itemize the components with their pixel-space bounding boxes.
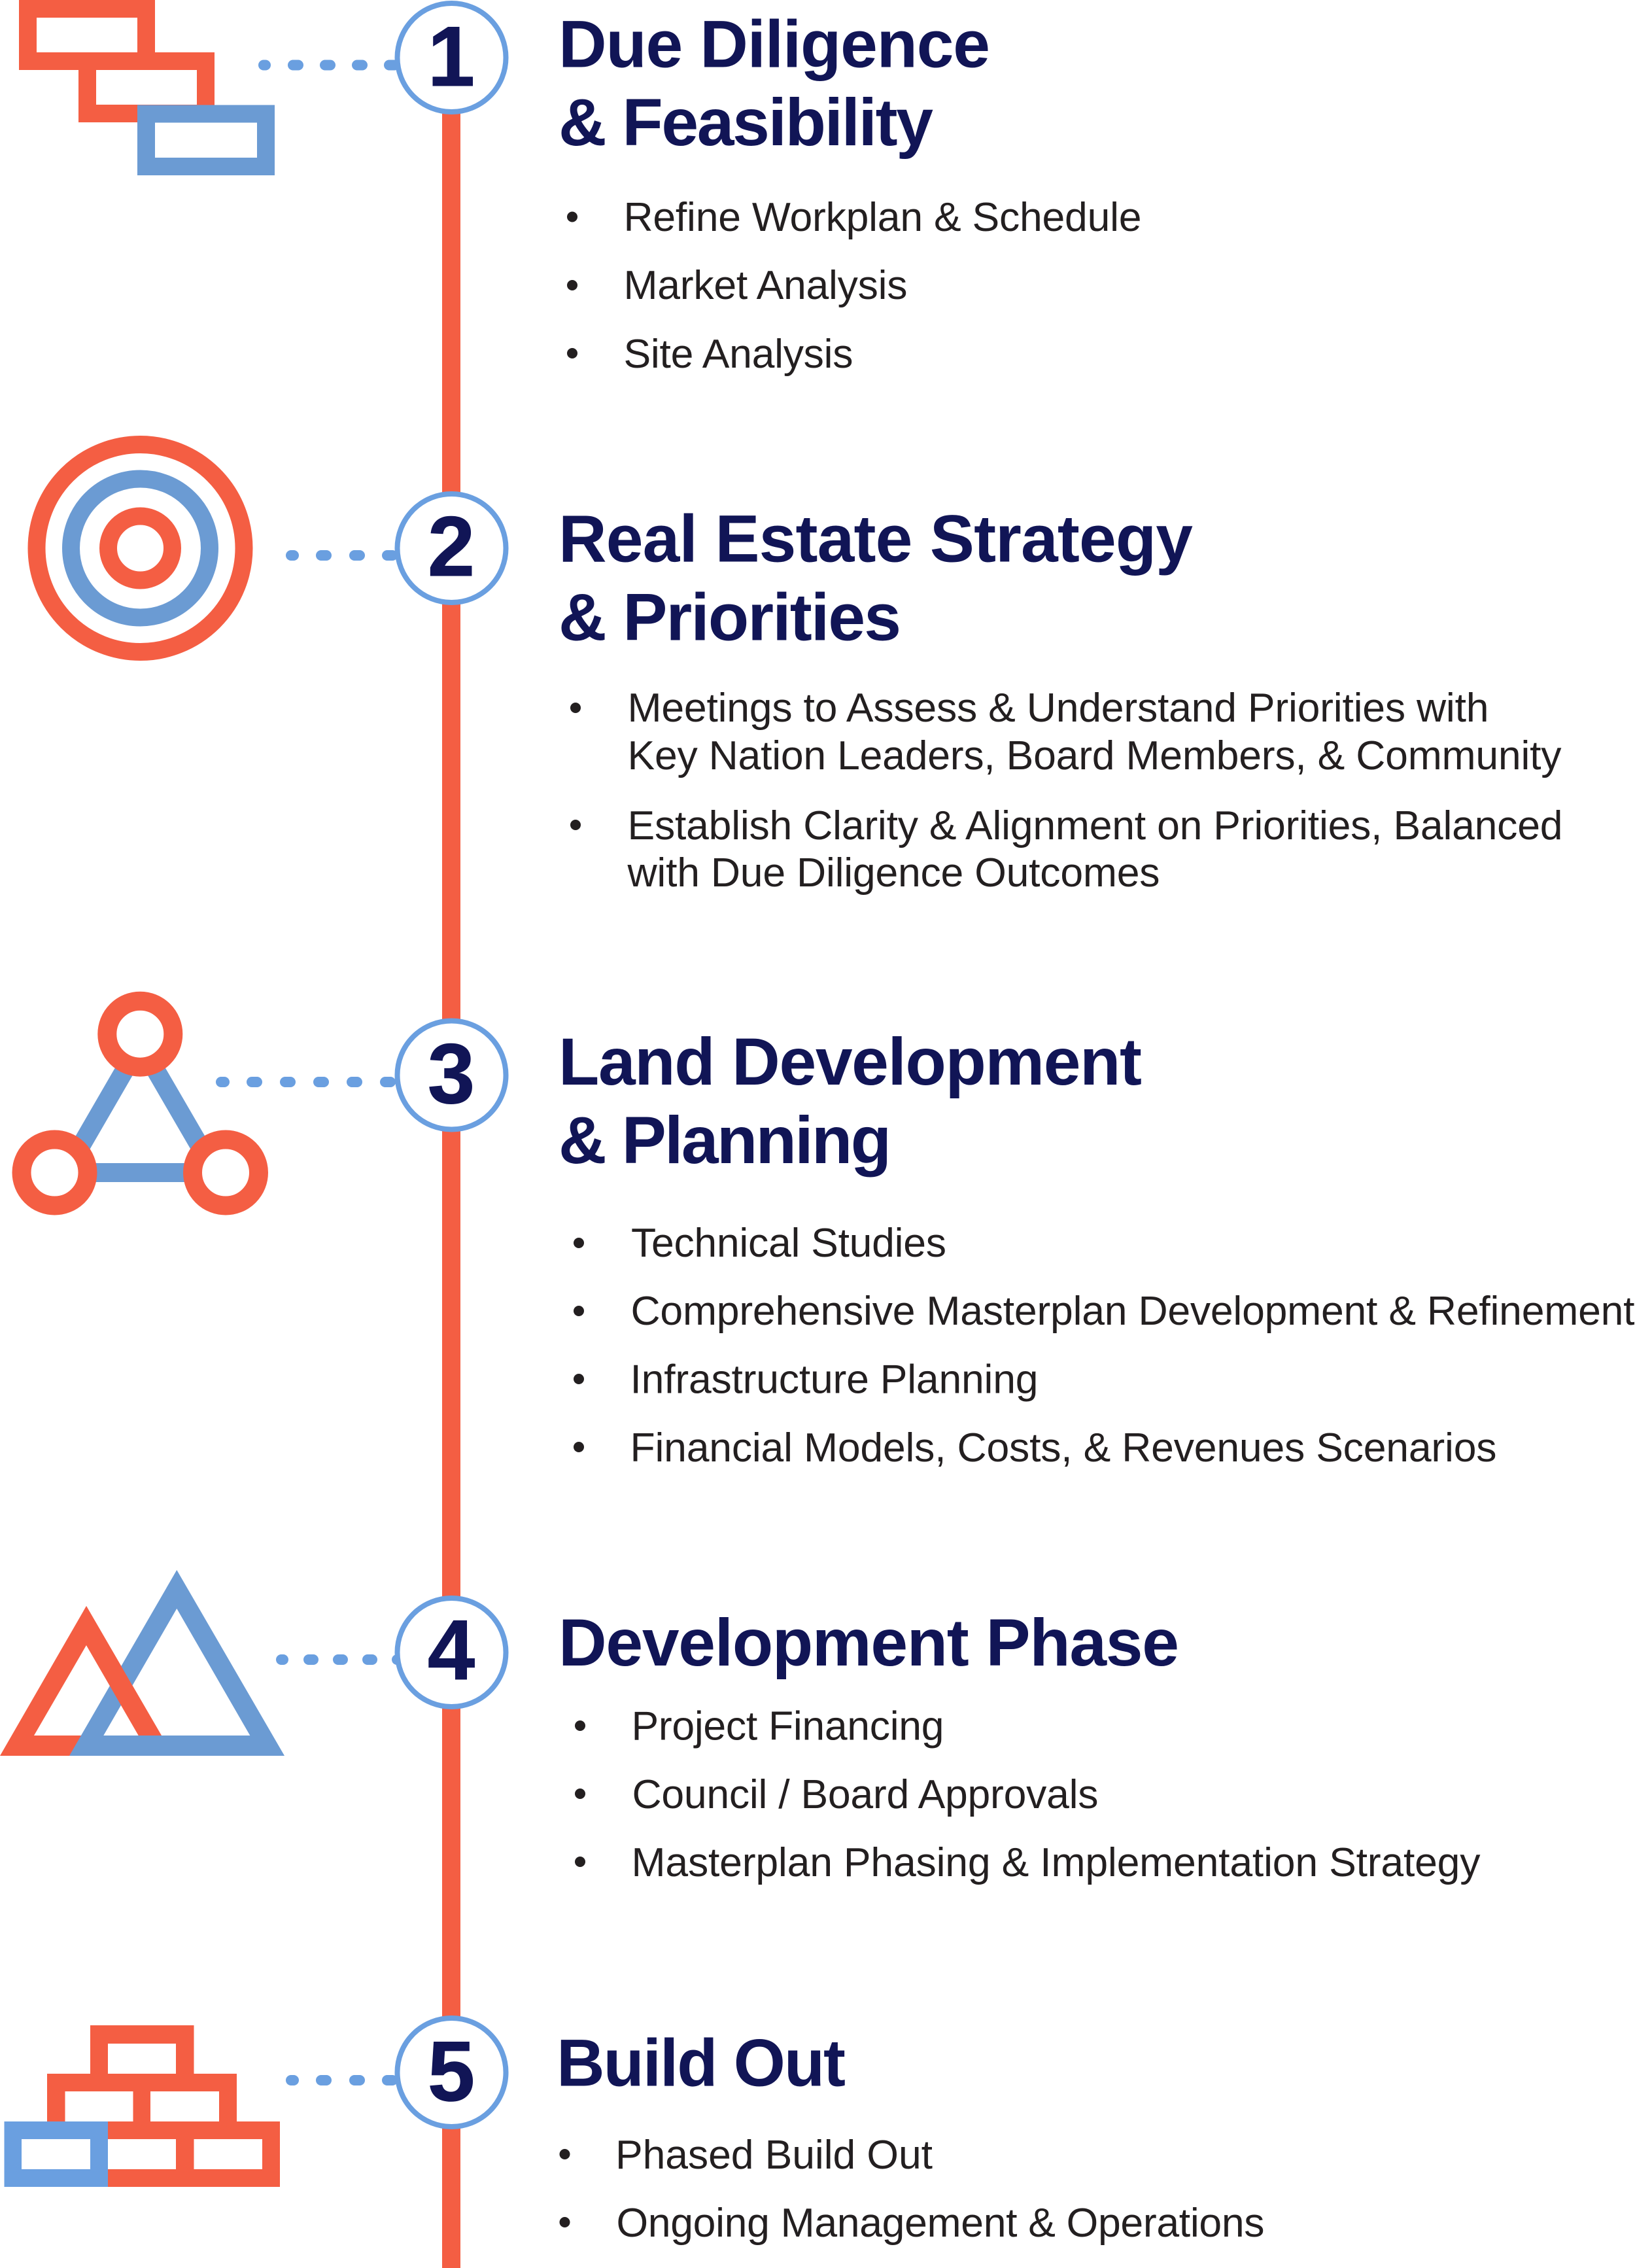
dotted connector 2: [286, 550, 398, 561]
heading: Land Development & Planning: Land Development: [559, 1024, 1142, 1099]
bullet list 2: Establish Clarity & Alignment on Priorities, Balanced: [628, 803, 1563, 848]
step 3 panel: [22, 1001, 1635, 1471]
icon: overlapping triangles: [0, 1570, 284, 1756]
bullet list 2: Key Nation Leaders, Board Members, & Community: [628, 733, 1562, 778]
number badge 1: [398, 3, 506, 112]
bullet list 2: with Due Diligence Outcomes: [627, 850, 1160, 896]
bullet list 3: Comprehensive Masterplan Development & Refinement: [630, 1288, 1635, 1334]
timeline vertical line: [442, 52, 460, 2268]
icon: brick pyramid: [4, 2025, 280, 2187]
number badge 3: [398, 1021, 506, 1129]
number badge 4: [398, 1598, 506, 1707]
bullet list 4: Masterplan Phasing & Implementation Strategy: [632, 1840, 1481, 1885]
bullet list 1: [567, 194, 1142, 377]
bullet list 5: Ongoing Management & Operations: [616, 2200, 1265, 2246]
dotted connector 4: [276, 1654, 402, 1665]
heading: Due Diligence & Feasibility: & Feasibility: [559, 85, 933, 160]
bullet list 5: [560, 2132, 1265, 2246]
dotted connector 1: [258, 60, 400, 71]
heading: Real Estate Strategy & Priorities: & Priorities: [559, 580, 901, 654]
bullet list 1: Refine Workplan & Schedule: [624, 194, 1142, 240]
heading: Real Estate Strategy & Priorities: [559, 501, 1193, 654]
bullet list 5: Phased Build Out: [615, 2132, 933, 2178]
bullet list 2: Meetings to Assess & Understand Priorities with: [628, 685, 1489, 731]
number badge 3: 3: [428, 1026, 475, 1121]
icon: overlapping rectangles: [27, 9, 266, 166]
bullet list 4: Project Financing: [632, 1703, 944, 1749]
bullet list 1: Market Analysis: [624, 262, 908, 308]
heading: Build Out: Build Out: [557, 2025, 846, 2100]
step 4 panel: [0, 1570, 1481, 1885]
heading: Land Development & Planning: & Planning: [559, 1103, 891, 1178]
bullet list 1: Site Analysis: [624, 331, 853, 377]
number badge 5: 5: [428, 2023, 475, 2119]
icon: target: [37, 445, 244, 652]
step 2 panel: [37, 445, 1563, 896]
heading: Development Phase: Development Phase: [559, 1605, 1179, 1680]
number badge 1: 1: [428, 9, 475, 104]
number badge 2: [398, 494, 506, 602]
bullet list 3: Technical Studies: [631, 1220, 946, 1266]
number badge 4: 4: [428, 1602, 475, 1698]
step 5 panel: [4, 2018, 1265, 2246]
step 1 panel: [27, 3, 1142, 377]
dotted connector 3: [216, 1077, 396, 1087]
bullet list 2: [570, 685, 1563, 896]
bullet list 4: [575, 1703, 1481, 1885]
bullet list 3: Infrastructure Planning: [630, 1357, 1039, 1403]
heading: Real Estate Strategy & Priorities: Real Estate Strategy: [559, 501, 1193, 576]
icon: linked circles triangle: [22, 1001, 259, 1206]
heading: Land Development & Planning: [559, 1024, 1142, 1178]
bullet list 3: [574, 1220, 1635, 1471]
number badge 5: [398, 2018, 506, 2127]
heading: Due Diligence & Feasibility: Due Diligence: [559, 7, 990, 81]
number badge 2: 2: [428, 498, 475, 594]
dotted connector 5: [286, 2075, 398, 2085]
bullet list 4: Council / Board Approvals: [632, 1771, 1099, 1817]
bullet list 3: Financial Models, Costs, & Revenues Scenarios: [630, 1425, 1496, 1471]
heading: Due Diligence & Feasibility: [559, 7, 990, 160]
